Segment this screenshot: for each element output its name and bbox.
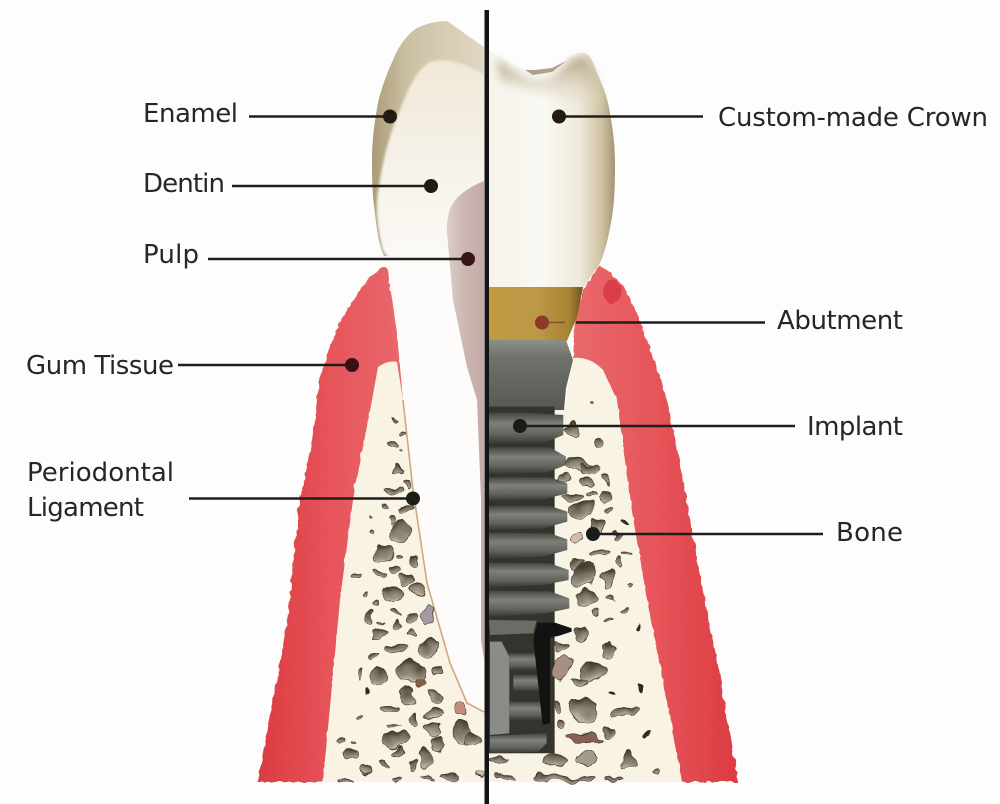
implant body with threads: [489, 407, 572, 753]
label: Implant: Implant: [807, 412, 903, 442]
natural tooth root: [382, 253, 483, 712]
periodontal ligament line: [403, 400, 484, 712]
label: Custom-made Crown: [552, 103, 988, 133]
label: Gum Tissue: Gum Tissue: [26, 351, 174, 381]
label: Pulp: [143, 240, 475, 270]
right gum tissue: [573, 265, 738, 782]
right bone: [488, 358, 682, 782]
natural tooth enamel: [372, 21, 484, 262]
label: Periodontal Ligament: Periodontal: [27, 458, 174, 488]
label: Periodontal Ligament: [27, 458, 420, 523]
left gum tissue: [258, 268, 405, 782]
label: Enamel: [143, 99, 397, 129]
abutment: [489, 287, 583, 341]
label: Custom-made Crown: Custom-made Crown: [718, 103, 988, 133]
label: Dentin: [143, 169, 438, 199]
custom-made crown: [488, 49, 615, 288]
natural tooth pulp: [447, 181, 484, 660]
bone pores: [335, 400, 659, 782]
label: Periodontal Ligament: Ligament: [27, 493, 144, 523]
label: Implant: [513, 412, 903, 442]
label: Pulp: Pulp: [143, 240, 199, 270]
natural tooth dentin: [377, 60, 486, 264]
left bone: [323, 362, 484, 782]
label: Enamel: Enamel: [143, 99, 238, 129]
implant collar: [489, 340, 573, 410]
center divider line: [484, 10, 489, 804]
label: Bone: [586, 518, 903, 548]
label: Dentin: Dentin: [143, 169, 225, 199]
label: Bone: Bone: [836, 518, 903, 548]
label: Abutment: [535, 306, 903, 336]
label: Gum Tissue: [26, 351, 359, 381]
label: Abutment: Abutment: [777, 306, 903, 336]
